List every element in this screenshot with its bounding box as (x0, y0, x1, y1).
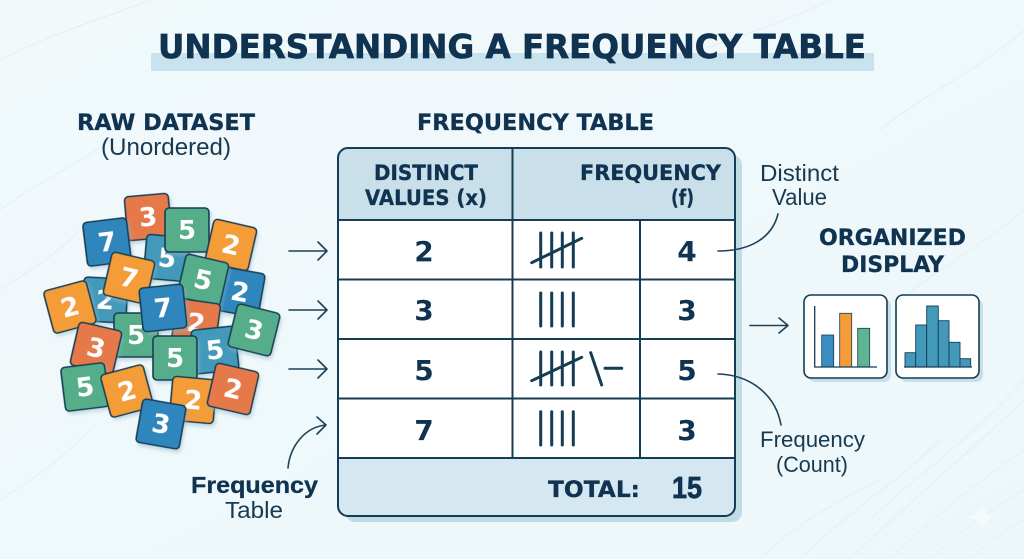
panel: scattered number cards: 5 (191, 264, 215, 298)
heading: organized display: ORGANIZED (819, 226, 966, 251)
panel: scattered number cards: 5 (127, 321, 145, 351)
panel: scattered number cards: 5 (166, 344, 184, 374)
panel: scattered number cards: 3 (149, 409, 172, 441)
chart: bar chart (804, 295, 891, 382)
callout: frequency count: Frequency (760, 427, 865, 452)
tally marks column (532, 233, 622, 445)
table header: distinct values: DISTINCT (374, 161, 479, 185)
title: UNDERSTANDING A FREQUENCY TABLE (158, 27, 866, 66)
panel: scattered number cards: 5 (74, 372, 96, 404)
panel: scattered number cards: 2 (221, 373, 245, 407)
panel: scattered number cards: 7 (117, 262, 141, 296)
callout: frequency count (718, 374, 865, 477)
table header: distinct values: VALUES (x) (365, 186, 487, 210)
panel: scattered number cards: 2 (219, 229, 243, 263)
frequency counts column (677, 235, 697, 447)
frequency counts column: 4 (677, 235, 697, 268)
panel: frequency table (338, 148, 742, 522)
total row (548, 470, 702, 505)
heading: organized display: DISPLAY (841, 253, 945, 278)
heading: raw dataset: (Unordered) (101, 134, 231, 161)
callout: distinct value: Distinct (760, 160, 840, 186)
table header: frequency: FREQUENCY (580, 161, 722, 185)
panel: scattered number cards: 3 (241, 314, 266, 348)
heading: organized display (819, 226, 966, 278)
distinct values column: 2 (414, 235, 434, 268)
panel: scattered number cards: 5 (178, 216, 196, 246)
distinct values column: 3 (414, 294, 434, 327)
panel: scattered number cards: 3 (84, 332, 108, 366)
distinct values column: 7 (414, 414, 434, 447)
panel: scattered number cards: 2 (183, 385, 203, 417)
panel: scattered number cards: 7 (96, 227, 118, 259)
panel: scattered number cards: 2 (115, 375, 140, 409)
heading: raw dataset: RAW DATASET (77, 111, 255, 136)
panel: scattered number cards: 2 (185, 308, 207, 340)
panel: scattered number cards: 7 (153, 293, 174, 325)
chart: histogram (896, 295, 983, 382)
panel: scattered number cards: 2 (58, 291, 83, 325)
table header: distinct values (365, 161, 487, 210)
callout: distinct value (718, 160, 840, 251)
table header: frequency (580, 161, 722, 210)
panel: scattered number cards: 2 (95, 286, 115, 316)
distinct values column: 5 (414, 354, 434, 387)
panel: scattered number cards: 5 (205, 335, 226, 367)
callout: distinct value: Value (772, 184, 827, 210)
total row: 15 (672, 470, 702, 505)
arrow: table to display (750, 318, 788, 333)
table header: frequency: (f) (671, 186, 694, 210)
arrows: dataset to table rows (288, 242, 327, 468)
panel: scattered number cards: 3 (138, 202, 158, 234)
callout: frequency count: (Count) (776, 452, 848, 477)
panel: scattered number cards (43, 193, 281, 449)
panel: scattered number cards: 5 (157, 243, 177, 275)
label: frequency table callout (191, 472, 318, 523)
frequency counts column: 5 (677, 354, 697, 387)
panel: scattered number cards: 2 (228, 277, 251, 309)
distinct values column (414, 235, 434, 447)
heading: raw dataset (77, 111, 255, 161)
frequency counts column: 3 (677, 294, 697, 327)
heading: frequency table: FREQUENCY TABLE (417, 111, 654, 136)
label: frequency table callout: Frequency (191, 472, 318, 498)
total row: TOTAL: (548, 478, 640, 503)
label: frequency table callout: Table (225, 497, 283, 523)
frequency counts column: 3 (677, 414, 697, 447)
